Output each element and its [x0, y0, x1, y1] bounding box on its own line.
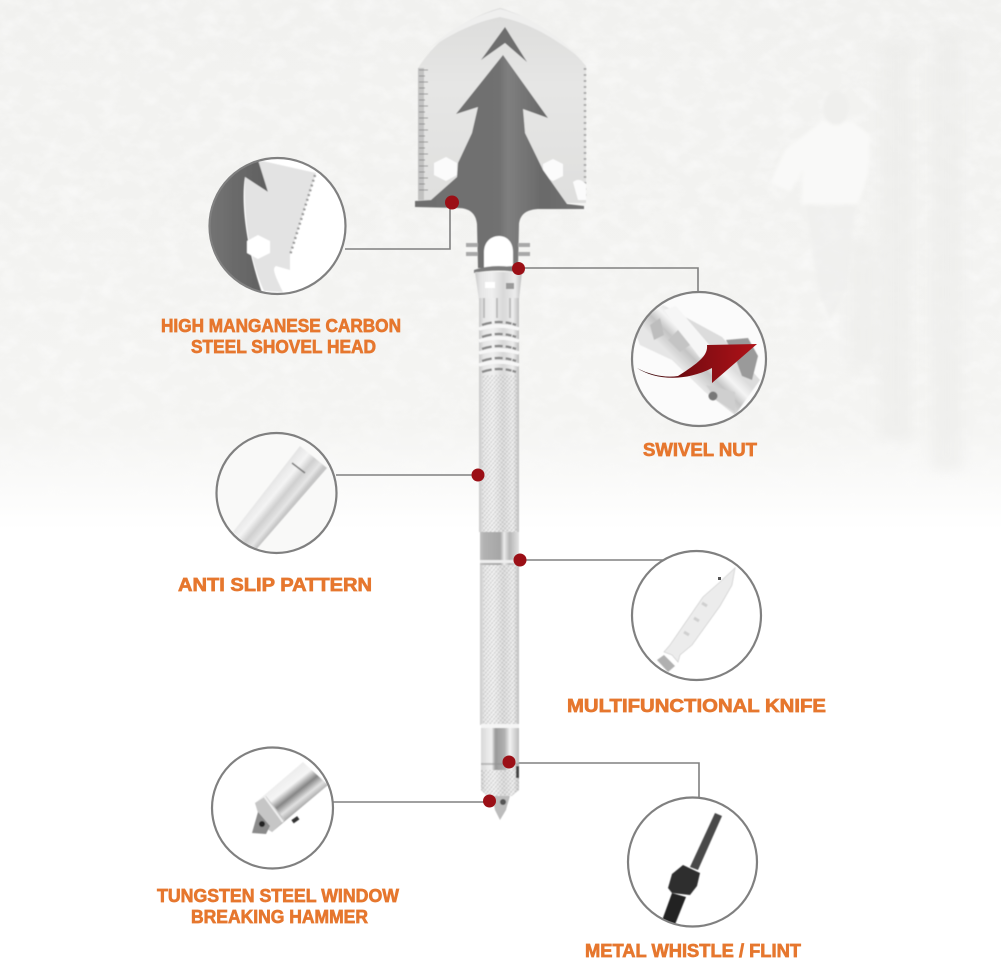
detail circle: shovel head saw edge — [205, 155, 346, 296]
handle: chrome whistle section — [481, 724, 519, 771]
lower shaft — [662, 892, 687, 924]
label: window breaking hammer: TUNGSTEN STEEL WINDOW — [157, 886, 399, 906]
hammer body — [255, 762, 328, 832]
detail circle: window breaking hammer — [212, 748, 333, 868]
background: faint tree trunks — [850, 30, 962, 470]
leader line: window breaking hammer — [332, 801, 489, 803]
hammer tip — [493, 796, 510, 820]
knife holes — [684, 603, 707, 635]
marker: hammer — [483, 794, 496, 808]
detail circle: swivel nut — [632, 292, 766, 426]
swivel collar — [475, 272, 522, 300]
hex hole — [247, 235, 270, 259]
handle: upper knurled section — [479, 375, 519, 532]
label: whistle and flint: METAL WHISTLE / FLINT — [585, 941, 801, 961]
shovel blade — [415, 8, 586, 268]
label: shovel head: HIGH MANGANESE CARBON — [161, 316, 401, 336]
handle: ribbed grip — [479, 298, 519, 376]
marker: whistle — [502, 756, 516, 768]
red rotation arrow — [637, 344, 757, 383]
knife base — [657, 655, 675, 672]
label: window breaking hammer — [157, 886, 399, 927]
label: anti slip pattern: ANTI SLIP PATTERN — [178, 575, 372, 595]
label: window breaking hammer: BREAKING HAMMER — [191, 907, 368, 927]
arrow tree emblem and neck — [415, 55, 584, 268]
background: faded forest photo — [0, 0, 1001, 476]
label: shovel head: STEEL SHOVEL HEAD — [191, 337, 376, 357]
background: faint hiker figure — [770, 91, 870, 320]
marker: swivel nut — [512, 262, 525, 275]
handle: centre band — [480, 532, 519, 565]
marker: anti slip — [472, 468, 484, 482]
whistle nut — [668, 865, 700, 895]
blade holes — [434, 157, 563, 181]
saw blade — [245, 160, 316, 292]
leader line: swivel nut — [520, 268, 698, 292]
leader line: anti slip pattern — [336, 474, 478, 476]
marker: knife — [514, 554, 526, 566]
hammer tip — [252, 812, 270, 834]
detail circle: multifunctional knife — [632, 551, 761, 680]
marker: shovel head — [445, 196, 459, 210]
arrow chevron — [481, 27, 527, 62]
swivel tube — [632, 305, 760, 415]
handle: knurled end cap — [481, 766, 519, 796]
knife blade — [664, 568, 735, 662]
pivot bolt — [466, 236, 530, 273]
dark emblem area — [210, 162, 268, 291]
flint rod — [690, 813, 722, 870]
label: swivel nut: SWIVEL NUT — [643, 440, 757, 460]
label: multifunctional knife: MULTIFUNCTIONAL KNIFE — [567, 696, 826, 716]
leader line: whistle and flint — [510, 763, 699, 798]
multi-tool shovel — [415, 8, 586, 820]
saw teeth — [290, 175, 315, 255]
handle: lower knurled section — [480, 565, 519, 725]
leader line: shovel head — [345, 204, 450, 249]
detail circle: metal whistle and flint — [628, 798, 757, 932]
pivot plate — [726, 338, 758, 380]
label: shovel head — [161, 316, 401, 357]
leader line: multifunctional knife — [520, 559, 664, 561]
detail circle: anti slip pattern — [216, 433, 336, 553]
